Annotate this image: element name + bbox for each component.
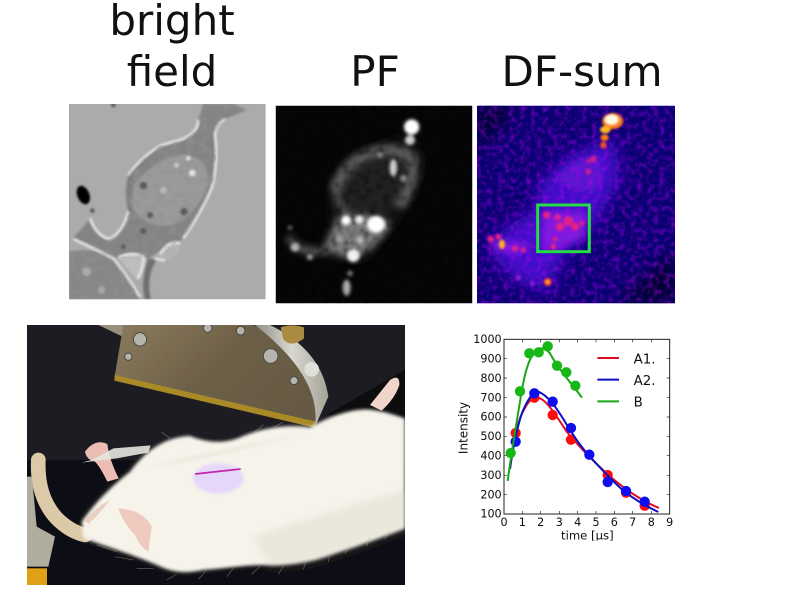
axis ticks and tick labels: 700 xyxy=(480,391,502,404)
axis ticks and tick labels: 900 xyxy=(480,352,502,365)
green region-of-interest box xyxy=(538,205,589,252)
axis ticks and tick labels: 1 xyxy=(519,516,526,529)
title: bright field: ﬁeld xyxy=(127,47,217,96)
axis ticks and tick labels: 5 xyxy=(592,516,600,529)
axis ticks and tick labels: 3 xyxy=(556,516,563,529)
title: DF-sum: DF-sum xyxy=(501,47,663,96)
axis ticks and tick labels: 4 xyxy=(574,516,581,529)
axis ticks and tick labels: 7 xyxy=(629,516,636,529)
axis ticks and tick labels: 500 xyxy=(480,430,502,443)
axis ticks and tick labels: 300 xyxy=(480,469,502,482)
axis ticks and tick labels: 400 xyxy=(480,449,502,462)
axis ticks and tick labels xyxy=(456,333,673,543)
axis ticks and tick labels: 800 xyxy=(480,372,502,385)
fur edge xyxy=(97,422,390,580)
rat body xyxy=(82,409,405,572)
stand at lower left xyxy=(27,477,55,567)
legend: B xyxy=(634,395,643,410)
rat hind paw xyxy=(118,508,152,552)
series B (green) xyxy=(505,341,582,481)
panel: bright field micrograph xyxy=(69,103,266,299)
axis ticks and tick labels: 600 xyxy=(480,411,502,424)
title: PF: PF xyxy=(350,47,400,96)
series A1 (red) xyxy=(510,392,659,511)
device: semicircular metal head xyxy=(114,324,328,428)
yellow label block xyxy=(27,568,47,585)
chart: intensity over time xyxy=(456,333,673,543)
axis ticks and tick labels: 2 xyxy=(537,516,544,529)
rat front paw xyxy=(85,442,119,482)
axis ticks and tick labels: 9 xyxy=(666,516,673,529)
device: metal rod xyxy=(98,325,124,336)
series A2 (blue) xyxy=(510,388,658,512)
axis ticks and tick labels: time [μs] xyxy=(561,529,614,543)
panel: DF-sum false-colour micrograph xyxy=(477,106,675,303)
axis ticks and tick labels: 8 xyxy=(648,516,655,529)
illuminated skin patch xyxy=(193,463,244,493)
axis ticks and tick labels: 200 xyxy=(480,488,502,501)
rat upper paw xyxy=(370,378,399,411)
plot frame xyxy=(504,339,670,514)
legend: A1. xyxy=(634,352,656,367)
axis ticks and tick labels: 1000 xyxy=(473,333,502,346)
panel: PF fluorescence micrograph xyxy=(276,106,472,303)
legend xyxy=(597,352,656,410)
panel: photograph of rat under device xyxy=(27,324,405,585)
axis ticks and tick labels: 6 xyxy=(611,516,618,529)
rat tail xyxy=(38,460,85,535)
legend: A2. xyxy=(634,374,656,389)
axis ticks and tick labels: 100 xyxy=(480,508,502,521)
axis ticks and tick labels: Intensity xyxy=(456,402,470,454)
axis ticks and tick labels: 0 xyxy=(500,516,508,529)
